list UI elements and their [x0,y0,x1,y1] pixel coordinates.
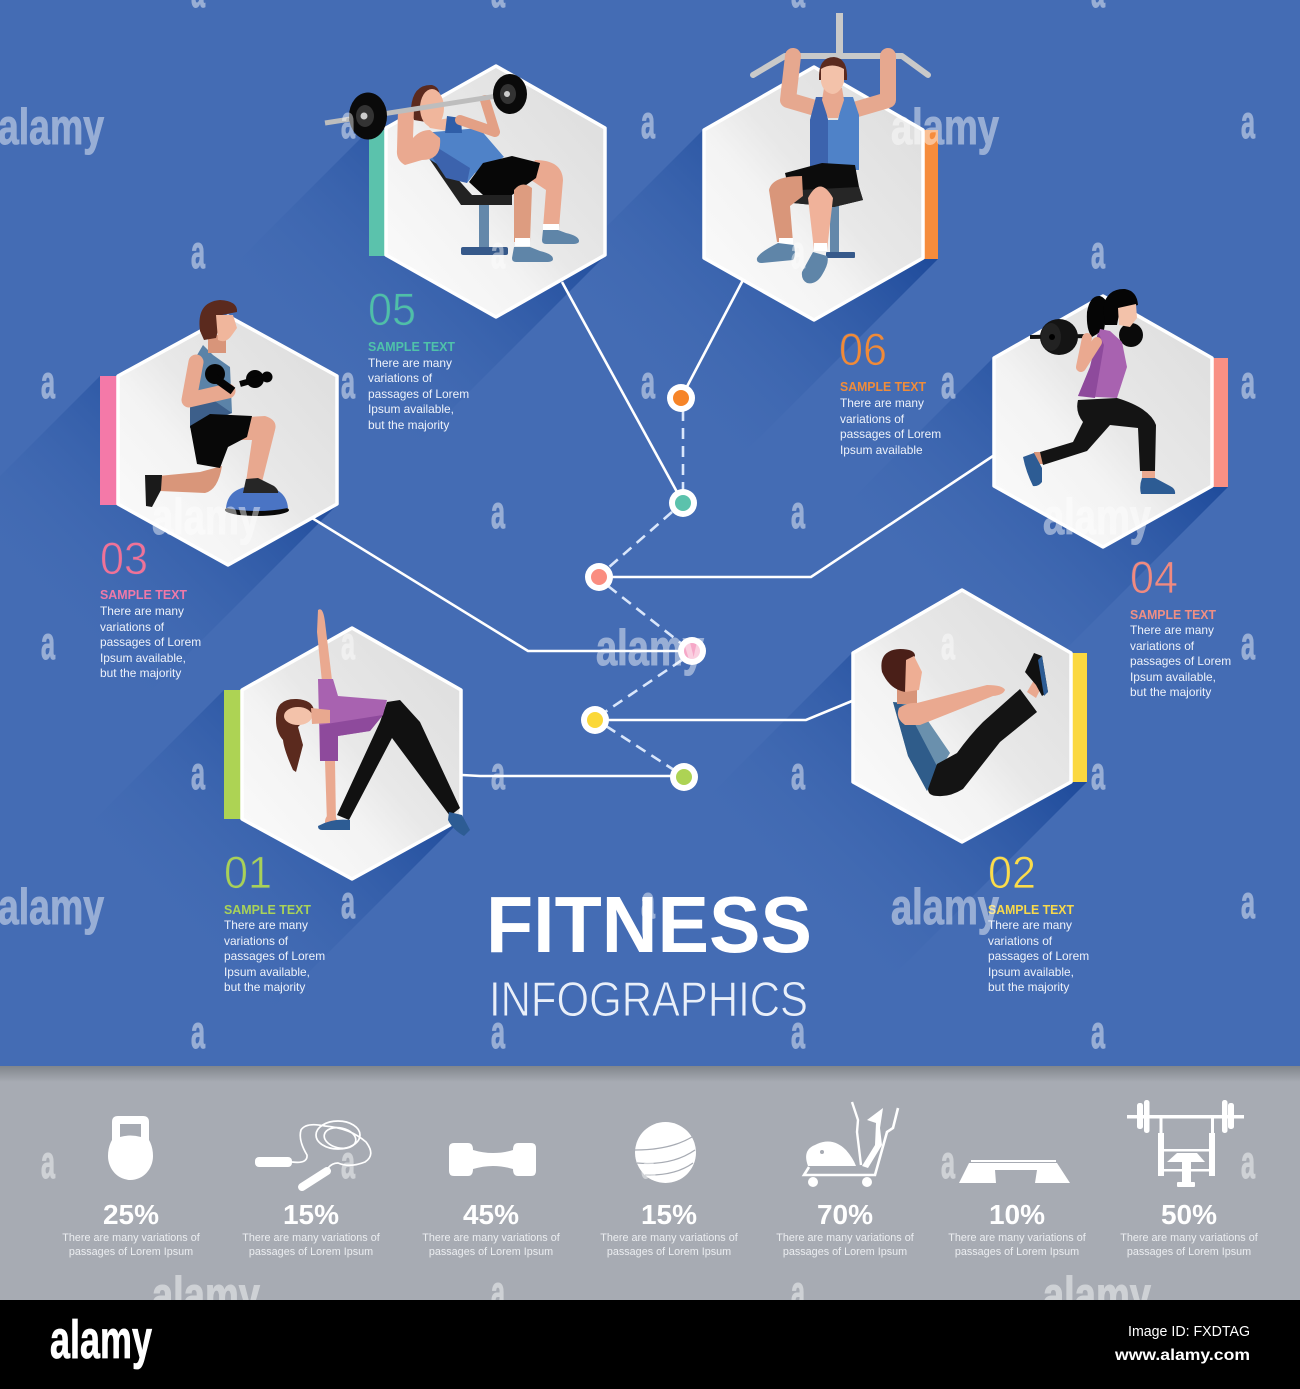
watermarks: a [641,96,655,148]
stats: percentages and captions: passages of Lorem Ipsum [607,1246,731,1258]
stats: percentages and captions: There are many variations of [422,1232,561,1244]
caption 03: SAMPLE TEXT [100,587,187,602]
grey stats band [0,1066,1300,1300]
watermarks: alamy [152,489,260,545]
figure: triangle stretch [276,609,470,836]
caption 02 [988,847,1089,994]
black footer bar [0,1300,1300,1389]
watermarks: a [791,1006,805,1058]
long shadows [0,130,1228,1049]
hexagon 01 [242,628,461,879]
caption 02: but the majority [988,980,1069,994]
figure: barbell lunge [1023,289,1175,494]
watermarks: a [791,747,805,799]
stats: percentages and captions: There are many variations of [948,1232,1087,1244]
watermarks: alamy [0,99,104,155]
watermarks: a [791,486,805,538]
watermarks: a [791,226,805,278]
caption 02: SAMPLE TEXT [988,902,1074,917]
watermarks: a [1241,876,1255,928]
watermarks: a [491,1266,505,1318]
footer logo: alamy [50,1310,152,1370]
caption 01: 01 [224,847,272,898]
caption 05: but the majority [368,418,449,432]
stats: percentages and captions: 25% [103,1199,159,1230]
watermarks: alamy [891,879,999,935]
stats: percentages and captions: passages of Lorem Ipsum [1127,1246,1251,1258]
stats: percentages and captions: 15% [641,1199,697,1230]
title [486,880,812,1027]
stats: percentages and captions: 50% [1161,1199,1217,1230]
caption 04 [1130,552,1231,699]
watermarks: a [641,876,655,928]
caption 05: 05 [368,284,416,335]
figure: lat pulldown [753,13,928,283]
hexagon 04 [994,296,1212,547]
panel: exercise 04 barbell lunge [994,289,1231,699]
hexagon 02 [853,590,1071,842]
watermarks: a [491,486,505,538]
watermarks: alamy [596,620,704,676]
caption 04: variations of [1130,639,1195,653]
watermarks: a [191,1006,205,1058]
caption 05: SAMPLE TEXT [368,339,455,354]
hexagon 06 [704,67,923,320]
color tab 02 [1071,653,1087,782]
figure: v-sit [881,649,1048,796]
caption 04: but the majority [1130,685,1211,699]
timeline nodes [581,384,706,791]
color tab 04 [1211,358,1228,487]
watermarks: a [341,876,355,928]
hexagon 05 [386,66,605,317]
caption 05: passages of Lorem [368,387,469,401]
watermarks: a [191,226,205,278]
icon: jump rope [255,1121,371,1187]
watermarks: a [341,96,355,148]
panel: exercise 05 bench press [325,66,605,432]
watermarks: a [1241,96,1255,148]
caption 02: There are many [988,918,1072,932]
caption 05: variations of [368,371,433,385]
caption 05 [368,284,469,432]
watermarks: a [791,1266,805,1318]
watermarks: a [491,747,505,799]
caption 06: variations of [840,412,905,426]
watermarks: a [41,1136,55,1188]
watermarks: alamy [891,99,999,155]
watermarks: a [941,356,955,408]
watermarks: a [941,1136,955,1188]
watermarks: a [1241,1136,1255,1188]
blue background [0,0,1300,1067]
watermarks: a [341,1136,355,1188]
caption 01: Ipsum available, [224,965,310,979]
caption 02: 02 [988,847,1036,898]
caption 03 [100,533,201,680]
caption 01: variations of [224,934,289,948]
caption 04: Ipsum available, [1130,670,1216,684]
watermarks: a [341,617,355,669]
panel: exercise 02 sit up [853,590,1089,994]
watermarks: a [341,356,355,408]
color tab 06 [922,130,938,259]
panel: exercise 01 triangle stretch [224,609,470,994]
stats: percentages and captions: 15% [283,1199,339,1230]
stats: percentages and captions: There are many variations of [600,1232,739,1244]
stats: percentages and captions: passages of Lorem Ipsum [783,1246,907,1258]
stats: percentages and captions: There are many variations of [776,1232,915,1244]
footer url: www.alamy.com [1114,1347,1250,1364]
stats: percentages and captions: passages of Lorem Ipsum [249,1246,373,1258]
icon: dumbbell [449,1143,536,1176]
caption 01: but the majority [224,980,305,994]
caption 03: but the majority [100,666,181,680]
color tab 01 [224,690,242,819]
caption 04: There are many [1130,623,1214,637]
watermarks: a [641,356,655,408]
icon: elliptical trainer [804,1102,898,1187]
icon: step platform [959,1160,1070,1183]
caption 01: passages of Lorem [224,949,325,963]
caption 03: 03 [100,533,148,584]
stats: percentages and captions [62,1199,1259,1258]
caption 04: SAMPLE TEXT [1130,607,1216,622]
watermarks: a [1091,1006,1105,1058]
caption 05: There are many [368,356,452,370]
caption 04: passages of Lorem [1130,654,1231,668]
figure: bench press [325,74,579,262]
caption 05: Ipsum available, [368,402,454,416]
caption 03: There are many [100,604,184,618]
caption 01: SAMPLE TEXT [224,902,311,917]
stats: percentages and captions: There are many variations of [242,1232,381,1244]
color tab 03 [100,376,118,505]
caption 02: passages of Lorem [988,949,1089,963]
watermarks: alamy [1043,1267,1151,1323]
title: FITNESS [486,880,812,969]
stats: percentages and captions: There are many variations of [1120,1232,1259,1244]
watermarks: a [41,356,55,408]
color tab 05 [369,130,387,256]
caption 04: 04 [1130,552,1178,603]
hexagon 03 [118,316,337,565]
connector lines [312,280,993,776]
watermarks: alamy [152,1267,260,1323]
watermarks: a [41,617,55,669]
watermarks: a [941,617,955,669]
figure: dumbbell curl [145,300,289,516]
watermarks: a [191,747,205,799]
stats: percentages and captions: 70% [817,1199,873,1230]
icon: kettlebell [108,1116,153,1180]
caption 03: Ipsum available, [100,651,186,665]
caption 02: Ipsum available, [988,965,1074,979]
stats: percentages and captions: There are many variations of [62,1232,201,1244]
caption 06: There are many [840,396,924,410]
caption 01: There are many [224,918,308,932]
watermarks: a [1241,356,1255,408]
stats: percentages and captions: passages of Lorem Ipsum [955,1246,1079,1258]
watermarks: a [1241,617,1255,669]
footer image id: Image ID: FXDTAG [1128,1323,1250,1340]
caption 06: 06 [839,324,887,375]
panel: exercise 06 lat pulldown [704,13,941,457]
stats: percentages and captions: 45% [463,1199,519,1230]
watermarks: alamy [1043,489,1151,545]
watermarks: a [491,1006,505,1058]
watermarks: a [1091,226,1105,278]
caption 06: Ipsum available [840,443,923,457]
icon: exercise ball [635,1122,696,1183]
stats: percentages and captions: passages of Lorem Ipsum [69,1246,193,1258]
caption 03: passages of Lorem [100,635,201,649]
caption 06: SAMPLE TEXT [840,379,926,394]
stats: percentages and captions: 10% [989,1199,1045,1230]
watermarks: a [641,1136,655,1188]
caption 02: variations of [988,934,1053,948]
caption 01 [224,847,325,994]
caption 03: variations of [100,620,165,634]
panel: exercise 03 dumbbell curl lunge [100,300,337,680]
caption 06 [839,324,941,457]
icon: weight bench [1127,1100,1244,1187]
watermarks: a [491,226,505,278]
watermarks: a [1091,747,1105,799]
caption 06: passages of Lorem [840,427,941,441]
watermarks: alamy [0,879,104,935]
stats: percentages and captions: passages of Lorem Ipsum [429,1246,553,1258]
title: INFOGRAPHICS [489,973,808,1027]
